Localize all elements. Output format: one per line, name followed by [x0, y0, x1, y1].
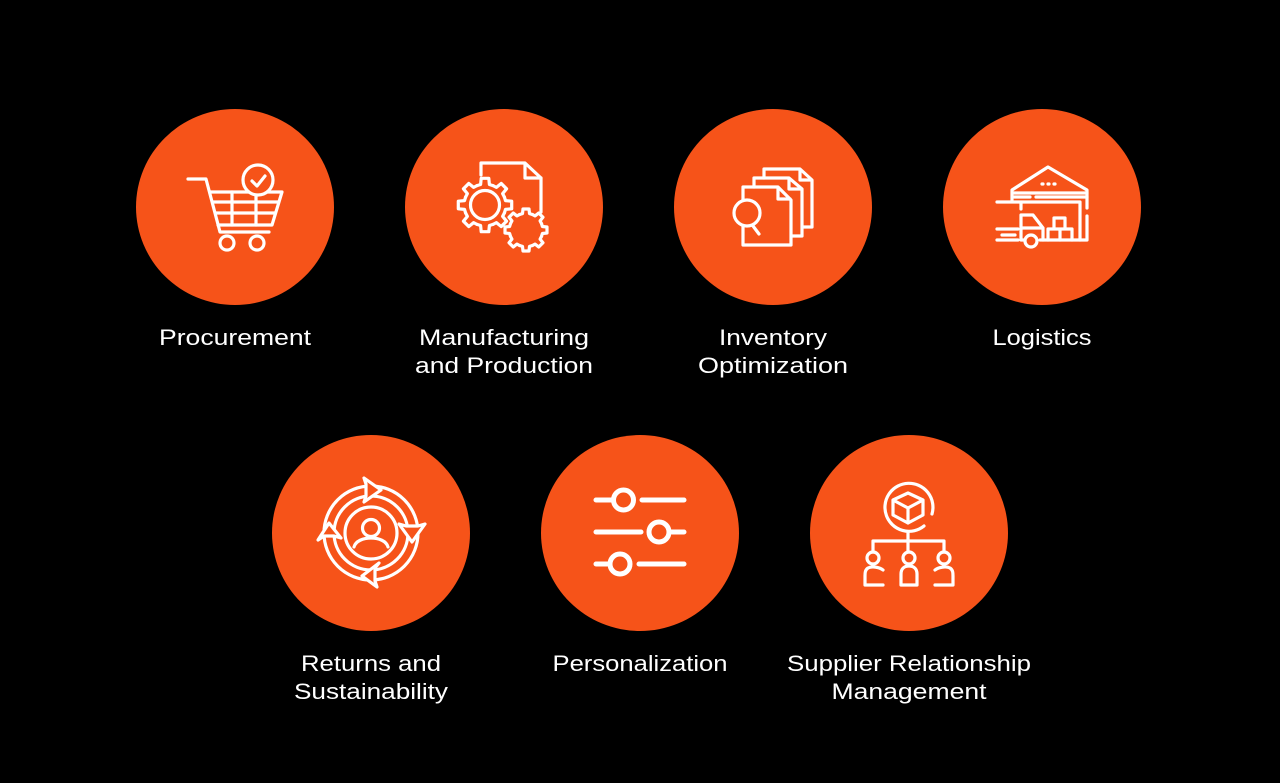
label: Personalization: Personalization: [552, 651, 728, 676]
panel: Logistics: [943, 109, 1141, 350]
panel: Procurement: [136, 109, 334, 350]
orange circle: Personalization: [541, 435, 739, 631]
label: Returns and Sustainability: [294, 651, 449, 704]
label: Returns and Sustainability: Returns and: [301, 651, 441, 676]
orange circle: Supplier: [810, 435, 1008, 631]
panel: Inventory Optimization: [674, 109, 872, 378]
orange circle: Logistics: [943, 109, 1141, 305]
orange circle: Procurement: [136, 109, 334, 305]
icon: shopping cart with check: [188, 165, 282, 250]
panel: Personalization: [541, 435, 739, 676]
label: Supplier Relationship Management: Supplier Relationship: [787, 651, 1031, 676]
label: Supplier Relationship Management: Management: [832, 679, 987, 704]
label: Logistics: Logistics: [992, 325, 1092, 350]
label: Manufacturing and Production: Manufacturing: [419, 325, 589, 350]
orange circle: Inventory: [674, 109, 872, 305]
panel: Supplier Relationship Management: [787, 435, 1031, 704]
label: Manufacturing and Production: [415, 325, 593, 378]
icon: supplier hierarchy with box: [865, 483, 953, 585]
label: Inventory Optimization: Inventory: [719, 325, 828, 350]
panel: Returns and Sustainability: [272, 435, 470, 704]
icon: warehouse with truck: [997, 167, 1087, 247]
icon: document with gears: [458, 163, 547, 251]
label: Inventory Optimization: Optimization: [698, 353, 848, 378]
orange circle: Returns: [272, 435, 470, 631]
icon: stacked documents with magnifier: [734, 169, 812, 245]
label: Supplier Relationship Management: [787, 651, 1031, 704]
label: Procurement: Procurement: [159, 325, 312, 350]
icon: sliders: [596, 490, 684, 574]
icon: circular arrows around person: [318, 478, 425, 587]
label: Manufacturing and Production: and Production: [415, 353, 593, 378]
label: Returns and Sustainability: Sustainability: [294, 679, 449, 704]
panel: Manufacturing and Production: [405, 109, 603, 378]
orange circle: Manufacturing: [405, 109, 603, 305]
label: Inventory Optimization: [698, 325, 848, 378]
